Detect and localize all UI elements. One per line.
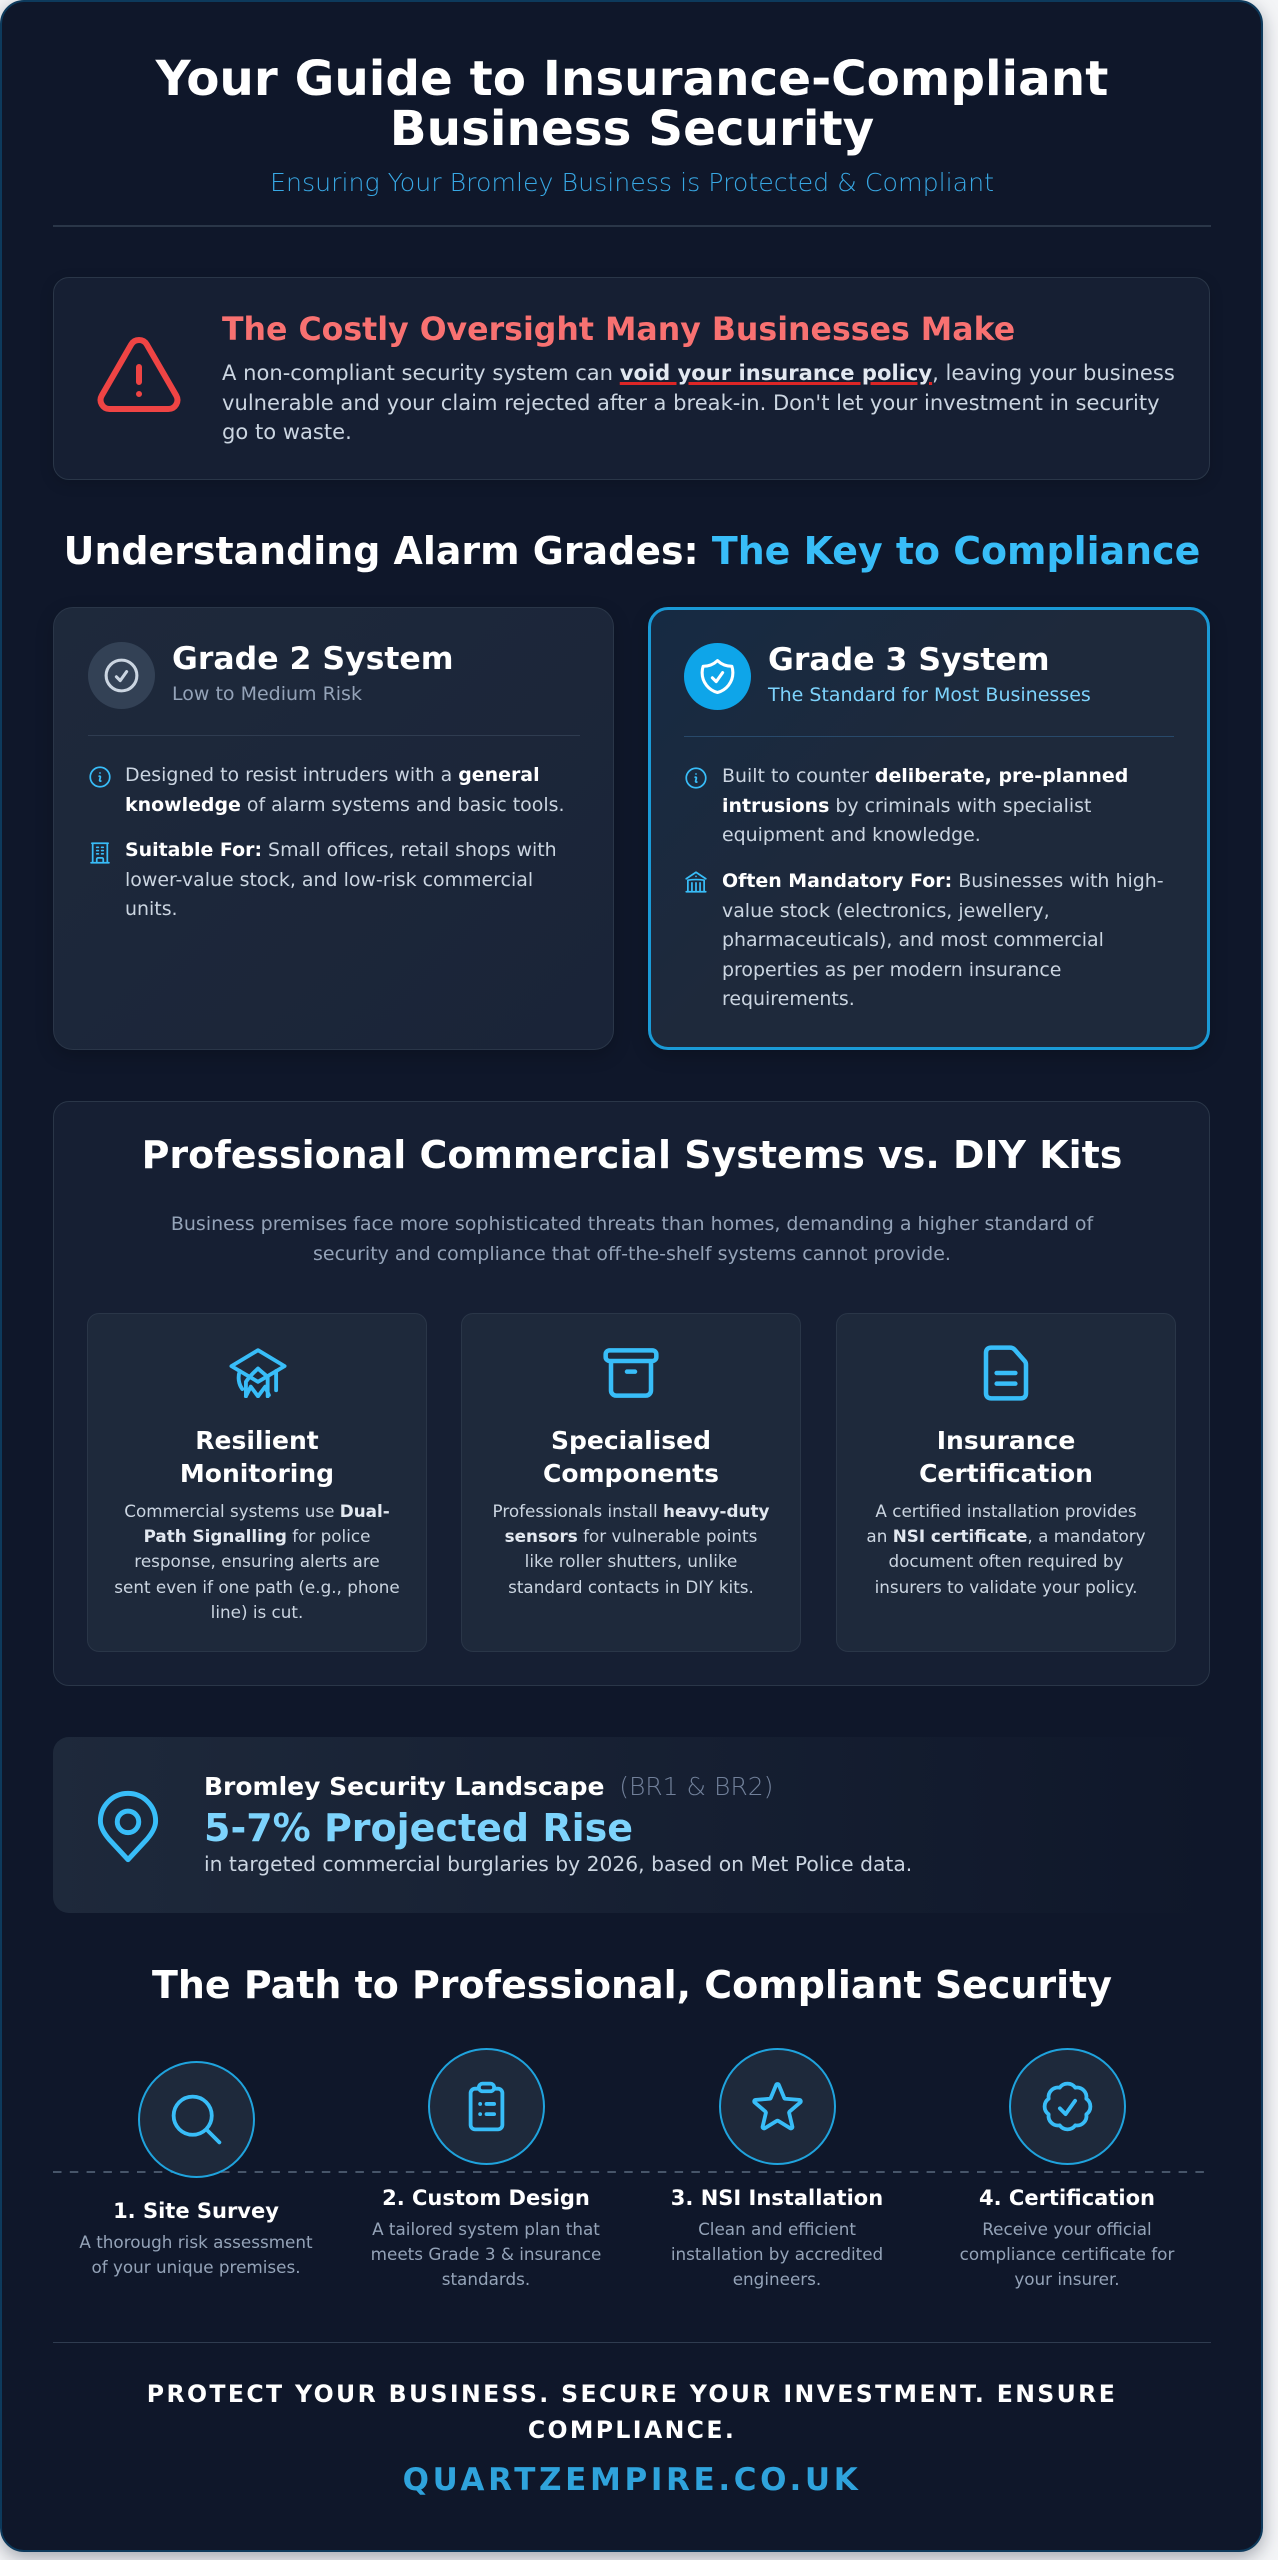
grade 3 point: mandatory: pharmaceuticals), and most commercial	[722, 929, 1104, 951]
grade 2 point: knowledge: knowledge of alarm systems and basic tools.	[125, 794, 564, 816]
step text: standards.	[442, 2269, 530, 2289]
feature text	[493, 1501, 770, 1597]
footer divider	[53, 2342, 1211, 2343]
feature text	[114, 1501, 400, 1622]
icon: office building	[90, 842, 110, 864]
feature title: Resilient	[195, 1426, 319, 1455]
feature text: like roller shutters, unlike	[525, 1551, 737, 1571]
icon: check circle	[88, 642, 155, 709]
alert body: A non-compliant security system can void your insurance policy, leaving your business	[222, 360, 1175, 385]
feature: insurance certification	[836, 1313, 1176, 1652]
step title: 3. NSI Installation	[671, 2186, 883, 2210]
alert body: vulnerable and your claim rejected after a break-in. Don't let your investment in security	[222, 390, 1160, 415]
icon: info	[89, 766, 111, 788]
subtitle: Ensuring Your Bromley Business is Protected & Compliant	[270, 168, 994, 197]
panel: commercial vs diy	[53, 1101, 1210, 1686]
step 4	[960, 2048, 1174, 2289]
title: Business Security	[390, 101, 874, 157]
grade 2 point: suitable for: Suitable For: Small offices, retail shops with	[125, 839, 557, 861]
grade 2 heading: Grade 2 System	[172, 641, 454, 677]
feature title: Certification	[919, 1459, 1093, 1488]
step title: 1. Site Survey	[113, 2199, 279, 2223]
grade 3 point: intrusions: Built to counter deliberate, pre-planned	[722, 765, 1128, 787]
step title: 2. Custom Design	[382, 2186, 590, 2210]
comparison description: security and compliance that off-the-shelf systems cannot provide.	[313, 1243, 951, 1265]
divider	[684, 736, 1174, 737]
grade 2 point: suitable for: units.	[125, 898, 178, 920]
grade 3 point: intrusions: equipment and knowledge.	[722, 824, 981, 846]
feature title	[919, 1426, 1093, 1488]
grade 3 point: mandatory: Often Mandatory For: Businesses with high-	[722, 870, 1164, 892]
heading: path: The Path to Professional, Compliant Security	[152, 1962, 1112, 2006]
step text: compliance certificate for	[960, 2244, 1174, 2264]
heading: alarm grades: Understanding Alarm Grades: The Key to Compliance	[64, 529, 1200, 573]
grade 2 subheading: Low to Medium Risk	[172, 683, 362, 705]
feature text: document often required by	[888, 1551, 1124, 1571]
step text: A thorough risk assessment	[79, 2232, 313, 2252]
title: Your Guide to Insurance-Compliant	[156, 50, 1108, 106]
icon: archive box	[603, 1348, 659, 1398]
grade 3 point: mandatory: value stock (electronics, jewellery,	[722, 900, 1050, 922]
icon: map pin	[98, 1790, 158, 1862]
feature title: Specialised	[551, 1426, 711, 1455]
feature text: Professionals install heavy-duty	[493, 1501, 769, 1521]
icon: academic cap	[229, 1348, 287, 1398]
grade 2 point: suitable for: lower-value stock, and low-risk commercial	[125, 869, 533, 891]
dashed timeline	[53, 2171, 1204, 2173]
grade 3 point: mandatory: properties as per modern insurance	[722, 959, 1061, 981]
grade 3 point: intrusions: intrusions by criminals with specialist	[722, 795, 1091, 817]
banner: bromley landscape	[53, 1737, 1210, 1913]
feature text: insurers to validate your policy.	[875, 1577, 1137, 1597]
step text: your insurer.	[1014, 2269, 1120, 2289]
feature text: Path Signalling for police	[144, 1526, 370, 1546]
feature text	[866, 1501, 1146, 1597]
step text	[671, 2219, 883, 2289]
step 1	[79, 2061, 313, 2277]
icon: magnifying glass	[138, 2061, 255, 2178]
title	[155, 50, 1108, 157]
comparison description: Business premises face more sophisticated threats than homes, demanding a higher standard of	[171, 1213, 1093, 1235]
feature title: Components	[543, 1459, 719, 1488]
icon: document	[984, 1345, 1028, 1401]
grade 2 point: knowledge: Designed to resist intruders with a general	[125, 764, 540, 786]
step text: meets Grade 3 & insurance	[371, 2244, 601, 2264]
landscape heading: Bromley Security Landscape (BR1 & BR2)	[204, 1772, 773, 1801]
feature text: line) is cut.	[211, 1602, 303, 1622]
landscape statistic: 5-7% Projected Rise	[204, 1806, 633, 1850]
icon: info	[685, 767, 707, 789]
grade 3 point: mandatory	[722, 870, 1164, 1010]
feature text: response, ensuring alerts are	[134, 1551, 380, 1571]
step text: of your unique premises.	[91, 2257, 301, 2277]
feature title	[180, 1426, 334, 1488]
landscape caption: in targeted commercial burglaries by 2026, based on Met Police data.	[204, 1852, 912, 1876]
icon: clipboard	[428, 2048, 545, 2165]
step text	[79, 2232, 313, 2277]
icon: institution	[685, 871, 707, 893]
alert body	[222, 360, 1175, 444]
panel: grade 3	[648, 607, 1210, 1050]
footer tagline: PROTECT YOUR BUSINESS. SECURE YOUR INVESTMENT. ENSURE	[147, 2380, 1117, 2408]
icon: warning triangle	[98, 337, 180, 412]
feature text: sensors for vulnerable points	[505, 1526, 757, 1546]
footer tagline	[147, 2380, 1117, 2444]
icon: check badge	[1009, 2048, 1126, 2165]
step 3	[671, 2048, 883, 2289]
grade 2 point: knowledge	[125, 764, 564, 816]
grade 3 heading: Grade 3 System	[768, 642, 1050, 678]
footer tagline: COMPLIANCE.	[528, 2416, 736, 2444]
feature title: Monitoring	[180, 1459, 334, 1488]
feature title	[543, 1426, 719, 1488]
step text	[960, 2219, 1174, 2289]
comparison heading: Professional Commercial Systems vs. DIY Kits	[142, 1133, 1122, 1177]
icon: shield	[684, 643, 751, 710]
alert body: go to waste.	[222, 419, 352, 444]
alert heading: The Costly Oversight Many Businesses Make	[222, 312, 1015, 348]
feature: specialised components	[461, 1313, 801, 1652]
step title: 4. Certification	[979, 2186, 1155, 2210]
grade 2 point: suitable for	[125, 839, 557, 920]
comparison description	[171, 1213, 1094, 1265]
step text: Receive your official	[982, 2219, 1152, 2239]
step 2	[371, 2048, 601, 2289]
step text: installation by accredited	[671, 2244, 883, 2264]
feature text: A certified installation provides	[875, 1501, 1137, 1521]
step text: engineers.	[733, 2269, 821, 2289]
panel: costly oversight alert	[53, 277, 1210, 480]
feature text: standard contacts in DIY kits.	[508, 1577, 754, 1597]
grade 3 subheading: The Standard for Most Businesses	[768, 684, 1091, 706]
step text: A tailored system plan that	[372, 2219, 600, 2239]
icon: star	[719, 2048, 836, 2165]
grade 3 point: intrusions	[722, 765, 1128, 846]
feature: resilient monitoring	[87, 1313, 427, 1652]
step text: Clean and efficient	[698, 2219, 856, 2239]
panel: grade 2	[53, 607, 614, 1050]
header divider	[53, 225, 1211, 227]
feature text: an NSI certificate, a mandatory	[866, 1526, 1146, 1546]
step text	[371, 2219, 601, 2289]
footer url: QUARTZEMPIRE.CO.UK	[403, 2462, 861, 2498]
divider	[88, 735, 580, 736]
grade 3 point: mandatory: requirements.	[722, 988, 855, 1010]
feature text: Commercial systems use Dual-	[124, 1501, 390, 1521]
feature title: Insurance	[937, 1426, 1075, 1455]
feature text: sent even if one path (e.g., phone	[114, 1577, 400, 1597]
